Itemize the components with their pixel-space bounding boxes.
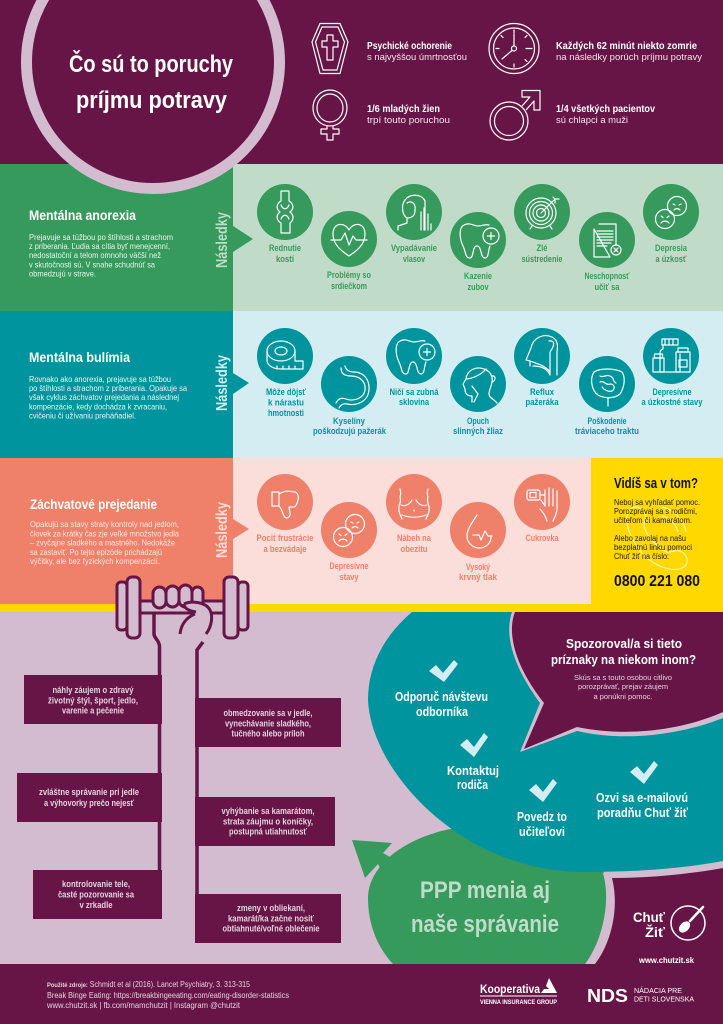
icon: measuring tape: [257, 328, 313, 384]
icon: target: [514, 184, 570, 240]
icon: clock: [489, 24, 539, 74]
icon: depressive faces: [321, 502, 377, 558]
text block: talk to them: porozprávať, prejav záujem: [578, 682, 668, 691]
text block: bulimia description: kompenzácie, kedy dochádza k zvracaniu,: [29, 402, 167, 412]
logo: chuť žiť: [633, 906, 705, 940]
dumbbell plates: [117, 577, 248, 638]
label: kazenie zubov: Kazenie: [464, 271, 492, 282]
logo: nadácia pre deti slovenska: [587, 986, 694, 1006]
box: body checking: kontrolovanie tele,: [62, 879, 130, 889]
heading: ppp menia aj naše správanie: naše správanie: [411, 911, 559, 938]
icon: obese torso: [386, 474, 442, 530]
logo: kooperativa: Kooperativa: [480, 984, 541, 996]
label: kazenie zubov: [464, 271, 492, 293]
label: vysoký krvný tlak: [459, 562, 498, 583]
text block: male patients: 1/4 všetkých pacientov: [556, 104, 655, 115]
text block: mortality: [367, 41, 467, 63]
heading: vidíš sa v tom: Vidíš sa v tom?: [614, 475, 698, 492]
icon: blood pressure drop: [450, 502, 506, 558]
text block: every 62 minutes: Každých 62 minút niekto zomrie: [556, 41, 697, 52]
label: poškodenie tráviaceho traktu: Poškodenie: [588, 416, 626, 427]
icon: enamel damage: [386, 328, 442, 384]
box: avoiding friends: strata záujmu o koníčky,: [223, 816, 313, 826]
arrow: binge eating consequences: [233, 519, 249, 539]
fist: [153, 585, 212, 636]
text block: bulimia description: Rovnako ako anorexia, prejavuje sa túžbou: [29, 375, 171, 384]
text block: sources: www.chutzit.sk | fb.com/mamchutzit | Instagram @chutzit: [46, 1001, 241, 1010]
heading: mentálna bulímia: Mentálna bulímia: [29, 349, 130, 365]
dumbbell and arm: [17, 577, 341, 943]
box: strange eating behaviour: a výhovorky prečo nejesť: [44, 798, 135, 808]
footer: [0, 964, 723, 1024]
arrow: bubble tail: [352, 840, 395, 878]
text: kontaktuj rodiča: [447, 763, 499, 792]
text block: binge eating description: sa zastaviť. Po tejto epizóde prichádzajú: [30, 548, 162, 557]
icon: hair loss: [386, 184, 442, 240]
text: povedz to učiteľovi: učiteľovi: [519, 824, 565, 839]
label: depresia a úzkosť: [655, 243, 688, 265]
box: body checking: [33, 870, 162, 919]
box: avoiding friends: vyhýbanie sa kamarátom,: [222, 806, 314, 816]
label: môže dôjsť k nárastu hmotnosti: hmotnosti: [268, 408, 304, 419]
text: povedz to učiteľovi: Povedz to: [517, 809, 567, 824]
arrow: anorexia consequences: [233, 226, 253, 252]
box: body checking: v zrkadle: [80, 900, 112, 910]
label: opuch slinných žliaz: slinných žliaz: [453, 426, 503, 437]
label: vypadávanie vlasov: [391, 243, 437, 265]
text block: help advice: Porozprávaj sa s rodičmi,: [614, 507, 697, 516]
label: rednutie kostí: [269, 243, 301, 265]
label: depresia a úzkosť: a úzkosť: [656, 254, 687, 265]
text block: young women: 1/6 mladých žien: [367, 104, 440, 115]
label: kyseliny poškodzujú pažerák: [313, 416, 387, 437]
title: Čo sú to poruchy: [69, 50, 234, 78]
box: body checking: časté pozorovanie sa: [58, 890, 135, 900]
teal panel: what to do: [368, 612, 723, 872]
label: poškodenie tráviaceho traktu: [575, 416, 639, 437]
text block: every 62 minutes: na následky porúch príjmu potravy: [556, 52, 702, 63]
arm outline: [154, 613, 203, 943]
text block: mortality: Psychické ochorenie: [367, 41, 452, 52]
icon: check 2: [460, 733, 488, 757]
text block: mortality: s najvyššou úmrtnosťou: [367, 52, 467, 63]
icon: stomach: [321, 356, 377, 412]
label: depresívne a úzkostné stavy: Depresívne: [652, 387, 692, 398]
text block: sources: [46, 980, 289, 1010]
logo: chuť žiť: Žiť: [645, 923, 665, 940]
text block: binge eating description: výčitky, ale bez fyzických kompenzácií.: [30, 557, 160, 566]
label: rednutie kostí: kostí: [276, 254, 294, 265]
icon: sad faces: [643, 184, 699, 240]
box: clothing changes: obtiahnuté/voľné oblečenie: [222, 924, 320, 934]
box: restricting food: obmedzovanie sa v jedle,: [224, 708, 312, 718]
text: kontaktuj rodiča: Kontaktuj: [447, 763, 499, 778]
box: clothing changes: kamarát/ka začne nosiť: [228, 914, 315, 924]
box: clothing changes: [195, 894, 341, 943]
icon: pill bottles: [643, 328, 699, 384]
label: neschopnosť učiť sa: Neschopnosť: [584, 271, 630, 282]
panel: vidíš sa v tom: [591, 458, 723, 612]
text block: bulimia description: však cyklus záchvatov prejedania a následnej: [29, 393, 179, 402]
box: strange eating behaviour: [17, 773, 162, 822]
label: depresívne a úzkostné stavy: [642, 387, 703, 408]
text: odporuč návštevu: [395, 689, 488, 719]
text block: sources: Break Binge Eating: https://breakbingeeating.com/eating-disorder-statistics: [47, 991, 289, 1000]
text block: binge eating description: Opakujú sa stavy straty kontroly nad jedlom,: [30, 520, 179, 529]
logo: kooperativa: VIENNA INSURANCE GROUP: [480, 999, 558, 1006]
label: môže dôjsť k nárastu hmotnosti: [266, 387, 306, 419]
header band: [0, 0, 723, 165]
label: depresia a úzkosť: Depresia: [655, 243, 688, 254]
box: healthy lifestyle interest: náhly záujem o zdravý: [52, 685, 134, 695]
text: odporuč návštevu: odborníka: [416, 704, 469, 719]
text block: anorexia description: z priberania. Ľudia sa cítia byť menejcenní,: [29, 242, 170, 251]
dumbbell bar: [138, 601, 226, 613]
label: problémy so srdiečkom: [327, 270, 371, 292]
label: zlé sústredenie: Zlé: [536, 243, 548, 254]
icon: coffin: [312, 24, 348, 74]
label: môže dôjsť k nárastu hmotnosti: Môže dôjsť: [266, 387, 306, 398]
heading: záchvatové prejedanie: Záchvatové prejedanie: [30, 496, 157, 512]
icon: check 1: [429, 660, 458, 682]
icon: check 3: [529, 779, 557, 802]
icon: tooth decay: [450, 212, 506, 268]
label: vysoký krvný tlak: krvný tlak: [459, 572, 498, 583]
green speech bubble: [352, 825, 613, 964]
text block: anorexia description: v skutočnosti sú. V snahe schudnúť sa: [29, 260, 156, 270]
label: pocit frustrácie a bezvádaje: a bezvádaje: [264, 544, 306, 555]
label: depresívne stavy: [330, 561, 368, 583]
text block: binge eating description: – zvyčajne sladkého a mastného. Nedokáže: [30, 538, 176, 548]
label: pocit frustrácie a bezvádaje: [256, 533, 314, 555]
text: ozvi sa e-mailovú poradňu: poradňu Chuť žiť: [597, 805, 689, 820]
text block: help advice: Alebo zavolaj na našu: [614, 534, 686, 543]
icon: phone watermark: [627, 507, 687, 569]
box: clothing changes: zmeny v obliekaní,: [237, 903, 305, 913]
text block: help advice: učiteľom či kamarátom.: [614, 516, 692, 525]
label: problémy so srdiečkom: srdiečkom: [331, 281, 367, 292]
label: ničí sa zubná sklovina: sklovina: [399, 397, 430, 408]
text block: help advice: Chuť žiť na číslo:: [614, 552, 669, 561]
label: ničí sa zubná sklovina: [390, 387, 439, 408]
icon: check 4: [630, 761, 658, 784]
website: www.chutzit.sk: [638, 955, 694, 965]
logo: nadácia pre deti slovenska: NDS: [587, 986, 628, 1006]
label: reflux pažeráka: [526, 387, 559, 408]
text block: binge eating description: človek za krátky čas zje veľké množstvo jedla: [30, 530, 180, 538]
text block: sources: Použité zdroje: Schmidt et al (2016). Lancet Psychiatry, 3. 313-315: [47, 980, 250, 989]
label: kyseliny poškodzujú pažerák: poškodzujú pažerák: [313, 426, 387, 437]
panel: mentálna anorexia: [0, 164, 723, 311]
label: nábeh na obezitu: [397, 533, 432, 555]
label: nábeh na obezitu: obezitu: [400, 544, 428, 555]
title: príjmu potravy: [76, 87, 228, 114]
text block: help advice: bezplatnú linku pomoci: [614, 543, 692, 552]
arrow: bulimia consequences: [233, 373, 249, 394]
box: healthy lifestyle interest: [24, 675, 162, 724]
label: reflux pažeráka: pažeráka: [526, 397, 559, 408]
label: kazenie zubov: zubov: [468, 282, 489, 293]
title: [69, 50, 234, 114]
text block: binge eating description: [30, 520, 180, 566]
label: neschopnosť učiť sa: učiť sa: [594, 282, 620, 293]
icon: glucose meter and hand: [514, 474, 570, 530]
label: vypadávanie vlasov: vlasov: [403, 254, 426, 265]
heading: spozoroval/a si tieto príznaky: príznaky na niekom inom?: [551, 652, 696, 667]
text block: bulimia description: po štíhlosti a strachom z priberania. Opakuje sa: [29, 384, 188, 393]
text block: every 62 minutes: [556, 41, 702, 63]
label: následky: Následky: [214, 502, 231, 558]
text block: talk to them: [574, 673, 672, 701]
heading: mentálna anorexia: Mentálna anorexia: [29, 207, 136, 223]
icon: female symbol: [313, 90, 347, 140]
box: avoiding friends: postupná utiahnutosť: [229, 826, 308, 836]
label: opuch slinných žliaz: [453, 416, 503, 437]
label: môže dôjsť k nárastu hmotnosti: k nárastu: [268, 398, 304, 408]
text block: male patients: sú chlapci a muži: [556, 115, 628, 126]
text: kontaktuj rodiča: rodiča: [457, 777, 489, 792]
icon: intestines: [579, 356, 635, 412]
label: vypadávanie vlasov: Vypadávanie: [391, 243, 437, 254]
label: depresívne stavy: Depresívne: [330, 561, 368, 572]
phone number: 0800 221 080: [614, 573, 700, 590]
logo: nadácia pre deti slovenska: NÁDACIA PRE: [634, 986, 682, 995]
icon: heart problems: [321, 211, 377, 267]
heading: ppp menia aj naše správanie: PPP menia aj: [420, 877, 550, 904]
text block: anorexia description: obmedzujú v strave.: [29, 270, 96, 278]
logo: nadácia pre deti slovenska: DETI SLOVENSKA: [634, 994, 694, 1004]
label: pocit frustrácie a bezvádaje: Pocit frustrácie: [256, 533, 314, 544]
label: nábeh na obezitu: Nábeh na: [397, 533, 432, 544]
speech bubble: noticed symptoms: [509, 612, 723, 752]
text block: talk to them: a ponúkni pomoc.: [594, 692, 652, 701]
text: ozvi sa e-mailovú poradňu: [596, 790, 689, 820]
label: opuch slinných žliaz: Opuch: [467, 416, 489, 427]
label: vysoký krvný tlak: Vysoký: [466, 562, 491, 573]
label: ničí sa zubná sklovina: Ničí sa zubná: [390, 387, 439, 398]
label: následky: Následky: [214, 212, 231, 268]
heading: spozoroval/a si tieto príznaky: Spozoroval/a si tieto: [566, 636, 682, 651]
box: avoiding friends: [195, 797, 335, 846]
text: povedz to učiteľovi: [517, 809, 567, 839]
label: rednutie kostí: Rednutie: [269, 243, 301, 254]
box: restricting food: [195, 698, 341, 747]
icon: acid reflux head: [514, 328, 570, 384]
text block: talk to them: Skús sa s touto osobou citlivo: [574, 673, 672, 682]
text block: young women: trpí touto poruchou: [367, 115, 450, 126]
icon: weak bones: [257, 184, 313, 240]
icon: thumbs down: [257, 474, 313, 530]
text block: anorexia description: nedostatoční a telom omnoho väčší než: [29, 251, 161, 260]
text block: young women: [367, 104, 450, 126]
box: restricting food: tučného alebo príloh: [232, 728, 304, 738]
text block: bulimia description: [29, 375, 188, 420]
text block: anorexia description: Prejavuje sa túžbou po štíhlosti a strachom: [29, 233, 173, 242]
label: zlé sústredenie: sústredenie: [522, 254, 562, 265]
logo: kooperativa: [480, 978, 558, 1006]
label: depresívne stavy: stavy: [340, 572, 359, 583]
icon: document with cross: [579, 212, 635, 268]
text: odporuč návštevu: Odporuč návštevu: [395, 689, 488, 704]
icon: swollen glands: [450, 356, 506, 412]
logo: chuť žiť: Chuť: [633, 909, 665, 925]
yellow divider: [0, 604, 723, 612]
label: depresívne a úzkostné stavy: a úzkostné stavy: [642, 397, 703, 408]
label: následky: Následky: [214, 355, 231, 411]
label: cukrovka: Cukrovka: [526, 533, 559, 544]
text block: help advice: [614, 498, 700, 561]
label: kyseliny poškodzujú pažerák: Kyseliny: [333, 416, 366, 427]
box: restricting food: vynechávanie sladkého,: [225, 718, 311, 728]
text block: bulimia description: cvičeniu či užívaniu preháňadiel.: [29, 412, 136, 420]
box: strange eating behaviour: zvláštne správanie pri jedle: [39, 787, 139, 797]
label: poškodenie tráviaceho traktu: tráviaceho traktu: [575, 426, 639, 437]
panel: mentálna bulímia: [0, 311, 723, 458]
text: ozvi sa e-mailovú poradňu: Ozvi sa e-mailovú: [596, 790, 688, 805]
box: healthy lifestyle interest: varenie a pečenie: [62, 706, 124, 716]
heading: spozoroval/a si tieto príznaky: [551, 636, 696, 667]
box: healthy lifestyle interest: životný štýl, šport, jedlo,: [48, 696, 138, 706]
panel: záchvatové prejedanie: [0, 458, 591, 605]
text block: help advice: Neboj sa vyhľadať pomoc.: [614, 498, 700, 507]
heading: ppp menia aj naše správanie: [411, 877, 559, 938]
text block: anorexia description: [29, 233, 173, 278]
panel: logo corner: [585, 862, 723, 965]
label: reflux pažeráka: Reflux: [530, 387, 555, 398]
text block: male patients: [556, 104, 655, 126]
label: neschopnosť učiť sa: [584, 271, 630, 293]
icon: male symbol: [490, 90, 540, 140]
label: zlé sústredenie: [522, 243, 562, 265]
title circle: [26, 0, 280, 188]
label: problémy so srdiečkom: Problémy so: [327, 270, 371, 281]
